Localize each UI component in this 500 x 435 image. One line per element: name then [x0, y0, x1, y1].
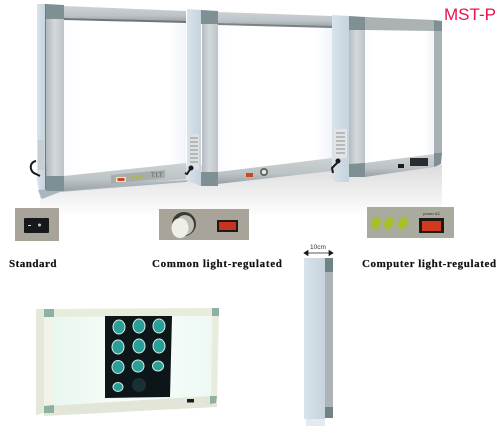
power cable	[332, 162, 338, 173]
viewer left rail	[44, 317, 54, 407]
data plate	[410, 158, 428, 166]
bottom rail	[64, 163, 186, 191]
power switch	[398, 164, 404, 168]
bottom rail	[218, 158, 332, 184]
corners	[46, 4, 64, 19]
side foot	[306, 419, 325, 426]
light box: standard panel	[31, 4, 187, 199]
light box: standard panel: T.f.T	[151, 173, 163, 179]
swatch: computer control strip: power AC	[423, 211, 440, 216]
swatch: standard switch	[15, 208, 59, 241]
left rail	[202, 23, 218, 173]
side housing	[187, 9, 201, 186]
corners	[349, 16, 365, 30]
side view with width dimension	[304, 244, 333, 426]
floor shadow	[40, 165, 442, 217]
dimension arrow	[304, 250, 333, 256]
film sheet	[105, 316, 172, 398]
top rail	[64, 6, 186, 22]
caption: common light-regulated: Common light-regulated	[152, 258, 283, 270]
CT scans	[112, 319, 165, 392]
faint scan	[132, 378, 146, 392]
power cable	[31, 161, 40, 176]
screen	[365, 31, 434, 163]
top rail	[218, 12, 332, 27]
swatch: computer control strip	[367, 207, 454, 238]
top rail	[365, 17, 434, 31]
film viewer with CT scan	[36, 308, 219, 416]
model label: MST-P	[444, 5, 496, 24]
corners	[201, 10, 218, 24]
right rail	[434, 31, 442, 155]
swatch: common dimmer and switch	[159, 209, 249, 240]
viewer screen	[54, 316, 212, 405]
side rail	[325, 258, 333, 418]
side body	[304, 258, 325, 419]
viewer corners	[44, 309, 54, 317]
viewer side	[36, 309, 44, 415]
bottom rail	[365, 154, 434, 177]
side housing	[37, 4, 46, 198]
screen	[64, 20, 186, 176]
viewer right rail	[211, 309, 219, 403]
viewer top rail	[44, 308, 219, 317]
screen	[218, 24, 332, 172]
power switch	[187, 399, 194, 402]
caption: computer light-regulated: Computer light-regulated	[362, 258, 497, 270]
label sticker	[189, 134, 199, 170]
left rail	[47, 19, 64, 176]
left rail	[349, 30, 365, 164]
dimension label: 10cm	[310, 244, 326, 251]
light box: computer panel	[332, 15, 442, 182]
label sticker	[38, 140, 44, 170]
control strip	[246, 173, 253, 177]
power cable	[185, 168, 191, 174]
light box: common panel	[185, 9, 332, 186]
control strip	[111, 170, 165, 184]
caption: standard: Standard	[9, 258, 57, 270]
side housing	[332, 15, 349, 182]
side corners	[325, 258, 333, 272]
label sticker	[334, 129, 347, 158]
viewer bottom rail	[44, 396, 217, 416]
